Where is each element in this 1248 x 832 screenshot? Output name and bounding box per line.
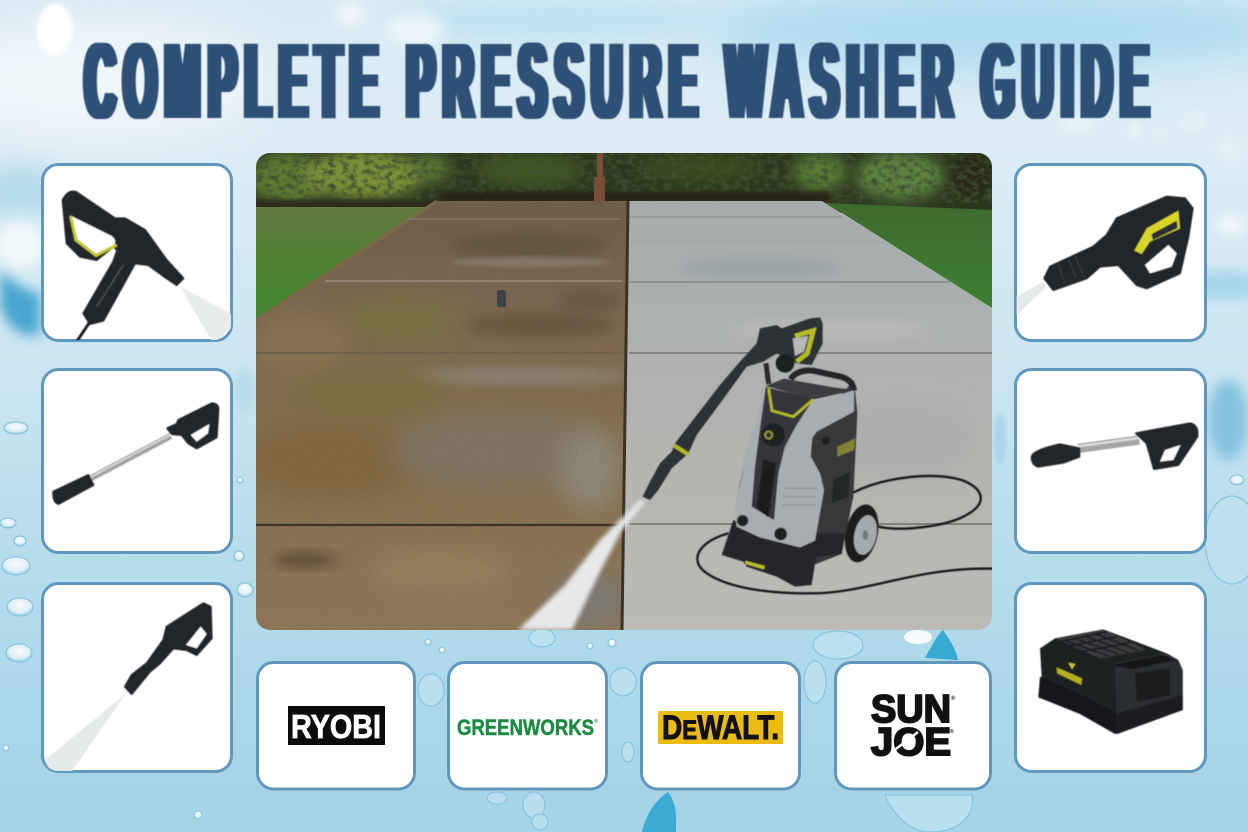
card: trigger gun with cable [42,164,233,343]
grey shell [735,388,854,547]
gauge window [757,459,776,517]
logo: Sun Joe: ® [950,728,954,735]
spray wand and gun [643,317,823,500]
right lawn [826,203,992,308]
logo: Greenworks [448,662,606,789]
right tool cards [1016,164,1206,772]
dial [762,423,785,447]
logo: Ryobi: RYOBI [291,708,381,745]
left tool cards [42,164,233,772]
logo: DeWalt: DEWALT. [662,709,779,747]
pressure washer [643,317,993,593]
expansion joint [622,201,628,630]
logo: Ryobi [258,662,414,789]
logo: Sun Joe: ® [951,695,956,702]
base [722,520,845,587]
rear dark housing [807,380,857,565]
brand logo cards [258,662,990,789]
card: metal wand [42,370,232,552]
side vent and badge [822,437,855,503]
logo: Greenworks: ® [594,718,598,725]
logo: Greenworks: GREENWORKS [457,715,594,740]
shell ridges [738,470,817,505]
left lawn [256,207,432,320]
card: battery pack [1016,584,1206,772]
hoses [697,476,993,593]
wheel [844,504,880,563]
water spray jet [518,499,645,630]
central photo: half-cleaned driveway [240,151,993,630]
logo: DeWalt [642,662,800,789]
yellow base clip [745,561,765,569]
card: gun body with yellow badge [1016,164,1206,340]
card: short metal wand [1016,370,1206,552]
wooden post [594,153,605,201]
logo: Sun Joe [836,662,990,789]
front dark panel [752,387,814,520]
dirty concrete side [240,201,630,630]
yellow chevron [769,389,813,417]
clean concrete side [622,201,992,630]
card: short lance with spray [42,584,232,772]
top panel and carry handle [766,371,855,399]
front feet lamps [737,515,787,540]
water droplets [0,422,1248,832]
logo: Sun Joe: SUN [871,688,951,731]
hedge background [250,151,992,213]
logo: Sun Joe: JOE [871,721,951,764]
